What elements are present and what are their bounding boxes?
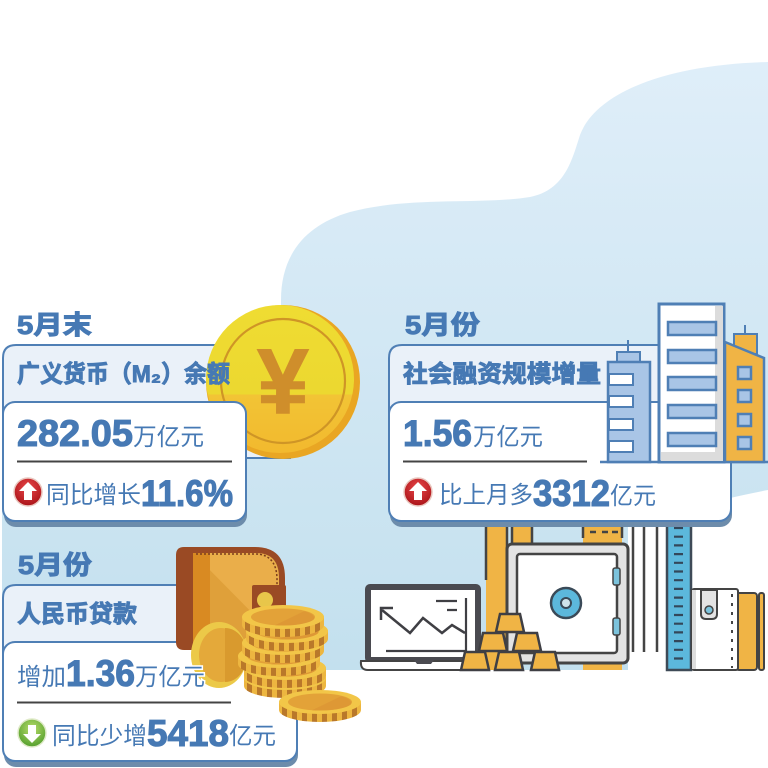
icon: coin stack (238, 605, 328, 698)
header tab (3, 585, 200, 660)
orange columns (486, 515, 622, 670)
white building lines (628, 515, 667, 670)
value card (389, 402, 732, 527)
label: 增加 (17, 664, 66, 691)
change label: 比上月多 (439, 482, 533, 509)
header text: 人民币贷款 (17, 601, 137, 628)
header tab (3, 345, 290, 458)
icon: green down arrow (18, 719, 46, 747)
icon: laptop with chart (361, 587, 478, 670)
growth value: 11.6% (141, 473, 233, 514)
orange building (725, 325, 764, 462)
heading: month end: 5月末 (17, 310, 92, 340)
unit: 万亿元 (473, 424, 543, 451)
change value: 3312 (533, 473, 610, 514)
icon: city buildings (600, 304, 768, 462)
unit: 万亿元 (135, 664, 205, 691)
background blob (2, 62, 768, 670)
value: 1.36 (66, 653, 135, 694)
icon: red up arrow (14, 478, 42, 506)
value: 282.05 (17, 413, 133, 454)
header text: 社会融资规模增量 (403, 361, 601, 388)
panel: M2 balance (3, 305, 360, 527)
icon: yuan coin: ¥ (257, 331, 309, 433)
tall building (659, 304, 724, 462)
value row (17, 653, 205, 694)
panel: social financing (389, 304, 768, 527)
value card (3, 642, 298, 767)
value card (3, 402, 247, 527)
blue ruler tower (667, 515, 691, 670)
icon: standing coin (191, 622, 247, 688)
change unit: 亿元 (229, 723, 276, 750)
change label: 同比少增 (52, 723, 147, 750)
icon: red up arrow (404, 478, 432, 506)
illustration: office buildings and safe scene (361, 515, 764, 670)
icon: yuan coin (206, 305, 360, 459)
icon: brown wallet (176, 547, 286, 650)
change value: 5418 (147, 713, 229, 754)
small building (608, 340, 650, 462)
header tab (389, 345, 662, 420)
unit: 万亿元 (133, 424, 204, 451)
value: 1.56 (403, 413, 472, 454)
icon: right wallet (692, 589, 764, 670)
heading: month: 5月份 (18, 550, 92, 580)
icon: single flat coin (279, 690, 361, 722)
panel: RMB loans (3, 547, 361, 767)
header text: 广义货币（M₂）余额 (17, 361, 230, 388)
change unit: 亿元 (610, 483, 656, 510)
icon: gold bars (461, 614, 559, 670)
growth label: 同比增长 (46, 482, 141, 509)
heading: month: 5月份 (405, 310, 480, 340)
icon: safe (507, 544, 628, 663)
